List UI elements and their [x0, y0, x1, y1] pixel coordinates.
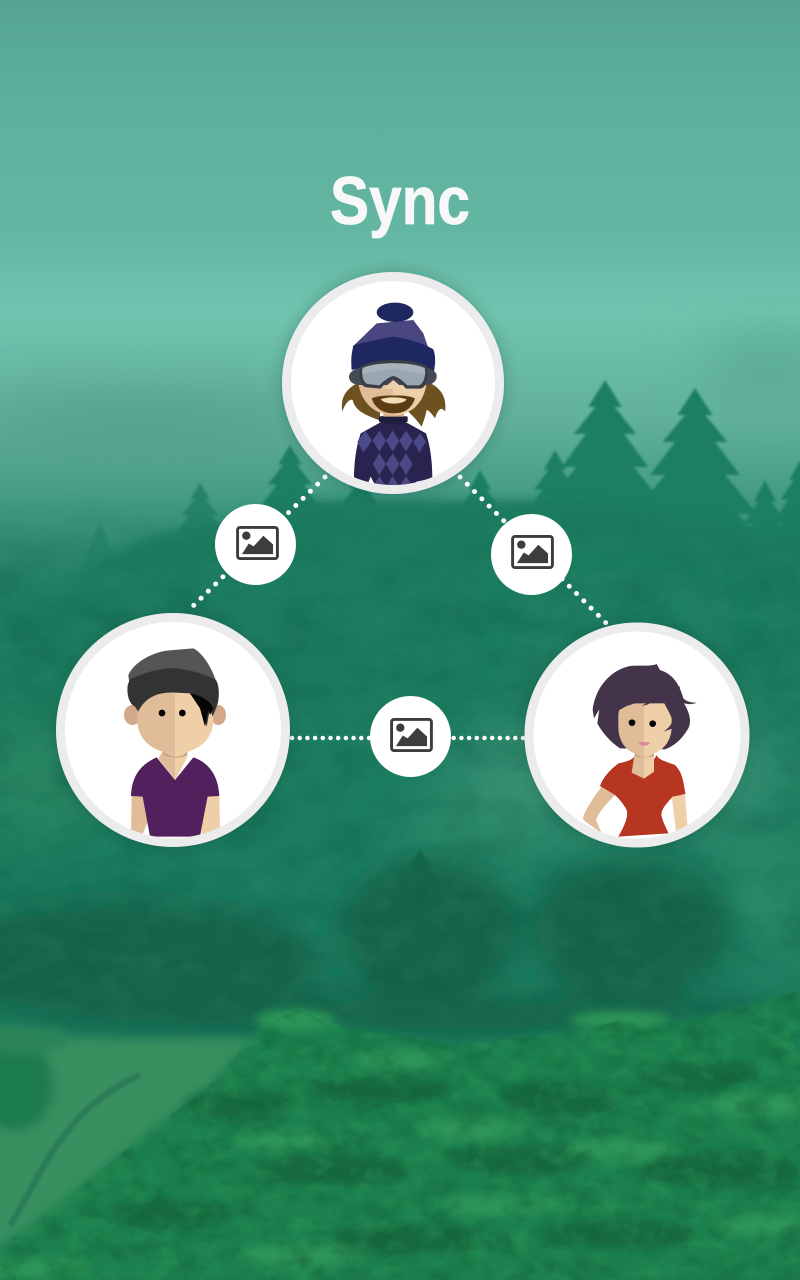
avatar: man in goggles and beanie: [282, 272, 504, 494]
title: Sync: [330, 163, 470, 239]
dotted connector: left to right: [292, 736, 526, 740]
avatar: man in grey beanie and purple shirt: [56, 613, 290, 847]
dotted connector: top to left: [187, 477, 325, 612]
hillside light patches: [0, 590, 800, 970]
dotted connector: top to right: [460, 477, 608, 625]
dark foreground trees: [0, 860, 800, 1037]
meadow: [0, 1030, 330, 1270]
shrubs: [0, 990, 800, 1280]
node: image icon bottom: [370, 696, 451, 777]
far treeline: [0, 380, 800, 692]
forest texture: [0, 571, 800, 958]
node: image icon right: [491, 514, 572, 595]
shrub texture: [0, 990, 800, 1280]
fog band: [0, 341, 800, 453]
avatar: woman with short hair and red dress: [524, 622, 750, 848]
node: image icon left: [215, 504, 296, 585]
forest mass: [0, 500, 800, 1100]
